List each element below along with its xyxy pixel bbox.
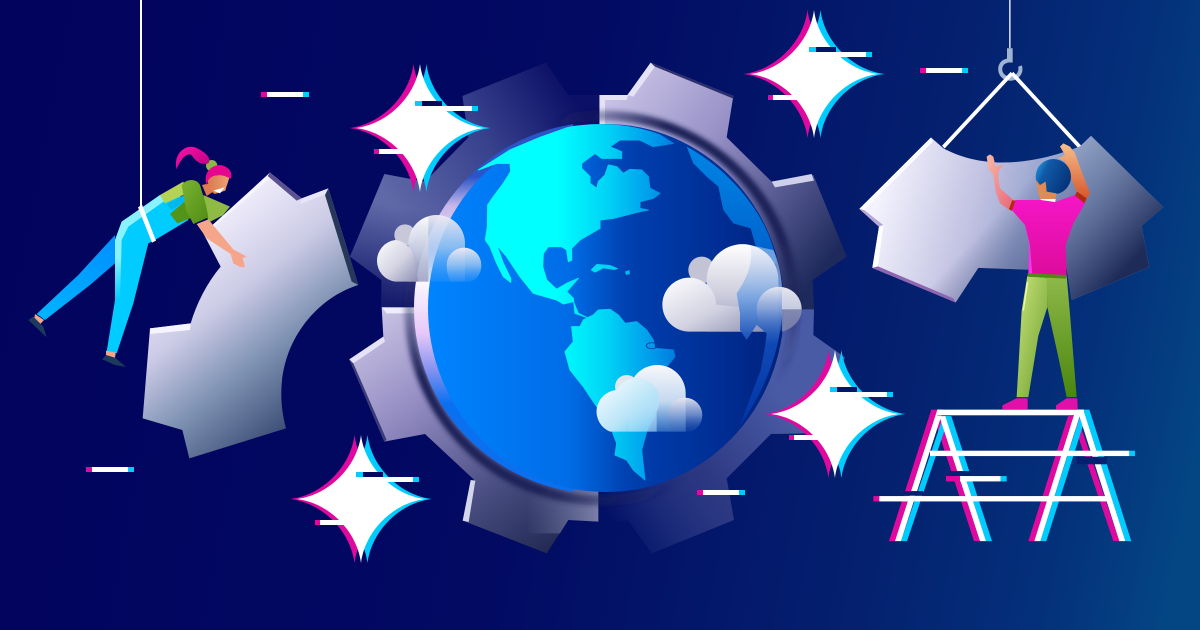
- man lower body: [1002, 273, 1078, 409]
- trousers: [1017, 273, 1077, 397]
- harness: [138, 205, 156, 243]
- dash: lower centre: [697, 490, 745, 495]
- sparkle: lower right: [764, 350, 906, 478]
- left worker gear segment: [143, 173, 358, 458]
- dash: upper left: [261, 92, 309, 97]
- lake: [646, 343, 657, 349]
- ladder: [873, 410, 1135, 541]
- land: far continent upper right: [687, 147, 777, 263]
- cloud: bottom: [597, 365, 702, 432]
- dash: upper right: [920, 68, 968, 73]
- gear quarter: bottom left: [349, 307, 598, 553]
- front leg and torso: [107, 195, 188, 353]
- cloud: left: [377, 215, 481, 282]
- man on ladder: [987, 143, 1090, 409]
- woman on rope: [28, 0, 247, 367]
- dash: lower left: [86, 467, 134, 472]
- front shoe: [102, 351, 126, 367]
- gear quarter: top right: [599, 63, 847, 309]
- lifting hook and slings: [943, 0, 1080, 147]
- collar: [1041, 199, 1056, 203]
- hanging gear segment: [859, 0, 1163, 302]
- ladder legs: magenta channel: [889, 410, 1119, 541]
- cloud: right: [662, 244, 802, 425]
- gear inner shadow band: [409, 115, 795, 501]
- segment body: [859, 136, 1163, 302]
- ladder top step: [937, 410, 1084, 416]
- ladder lower step: [873, 496, 1107, 501]
- rope: [140, 0, 142, 207]
- gear quarter: bottom right: [598, 309, 845, 553]
- near arm: [197, 219, 247, 267]
- shoes: [1002, 398, 1078, 409]
- ocean: [428, 124, 784, 492]
- ladder glitch gaps: [900, 457, 1107, 496]
- t-shirt: [1009, 192, 1087, 275]
- hair: [1036, 159, 1071, 194]
- large gear with four quarters: [349, 63, 847, 553]
- land: South America: [565, 309, 675, 480]
- sparkle: bottom left: [290, 435, 432, 563]
- face and neck: [1036, 180, 1057, 201]
- globe highlight ring: [414, 124, 574, 492]
- ladder legs: cyan channel: [901, 410, 1131, 541]
- land: Caribbean islands: [591, 264, 630, 275]
- ladder legs: white channel: [895, 410, 1125, 541]
- land: North America: [478, 125, 673, 318]
- man upper body: [987, 143, 1090, 275]
- ladder short glitch step: [946, 476, 1007, 481]
- sparkle: top centre: [350, 64, 490, 192]
- far arm and hand: [987, 154, 1013, 210]
- near arm and hand: [1058, 143, 1090, 198]
- ladder middle step: [930, 451, 1135, 456]
- gear quarter: top left: [350, 63, 599, 307]
- back shoe: [28, 314, 47, 337]
- far arm: [203, 195, 230, 223]
- shirt: [160, 180, 208, 224]
- globe: [428, 124, 784, 492]
- sparkle: top right: [744, 10, 884, 138]
- back leg: [37, 235, 115, 320]
- head: [176, 147, 231, 196]
- land seen through the cloud: [737, 245, 783, 425]
